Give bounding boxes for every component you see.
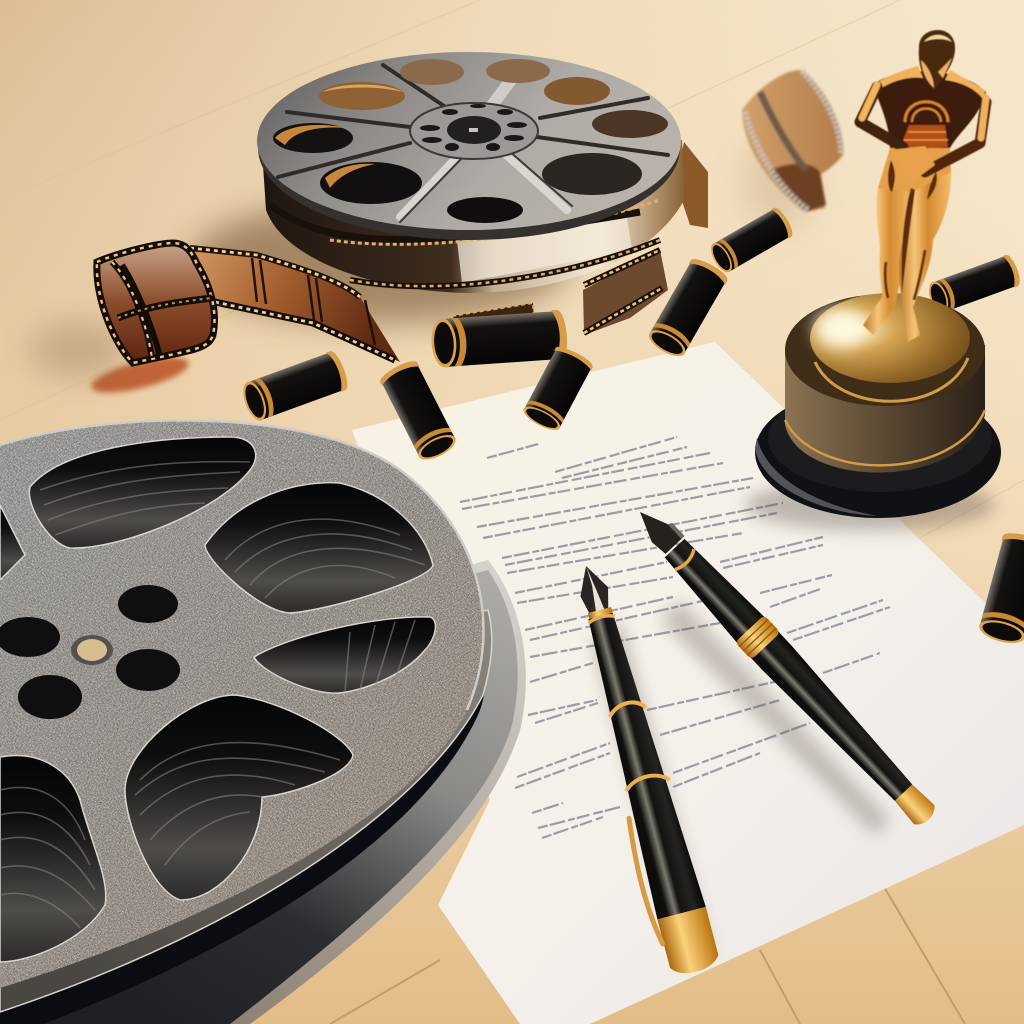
small film reel bbox=[257, 52, 708, 335]
canister 7 bbox=[925, 253, 1023, 316]
center hub bbox=[71, 635, 113, 665]
figure head bbox=[919, 30, 955, 90]
figure chest bbox=[873, 72, 986, 148]
top disc face bbox=[0, 420, 483, 988]
small hub holes bbox=[0, 585, 180, 719]
film canisters bbox=[239, 205, 1024, 648]
sheet of paper bbox=[352, 342, 1024, 1024]
figure arms bbox=[860, 87, 903, 147]
loose film strip bbox=[583, 250, 668, 335]
figure torso bbox=[878, 147, 951, 192]
figure left leg bbox=[863, 187, 912, 335]
canister 3 bbox=[377, 357, 460, 465]
curled film strip, top right bbox=[742, 70, 843, 212]
canister 2 bbox=[430, 309, 569, 369]
reel spokes bbox=[278, 65, 668, 222]
film strip behind canister bbox=[452, 303, 534, 330]
golden figure bbox=[860, 30, 986, 342]
shadows on table bbox=[30, 130, 816, 400]
script text lines bbox=[460, 437, 890, 838]
film behind reel bbox=[675, 142, 708, 228]
reel hub bbox=[410, 103, 538, 159]
outer disc rim bbox=[0, 560, 526, 1024]
canister 4 bbox=[520, 343, 595, 435]
metal speckle bbox=[0, 420, 483, 988]
fountain pen, left bbox=[560, 558, 721, 980]
big film reel stack bbox=[0, 420, 526, 1024]
canister 6 bbox=[707, 205, 796, 276]
pen shadows bbox=[592, 479, 995, 962]
reel windows bbox=[0, 437, 435, 962]
figure right leg bbox=[899, 170, 951, 342]
reel windows bbox=[273, 59, 668, 223]
figure leg shading bbox=[888, 160, 937, 295]
canister 1 bbox=[239, 349, 351, 424]
dark gap bbox=[0, 640, 486, 1024]
second disc rim bbox=[0, 610, 492, 1012]
film layers inside windows bbox=[0, 462, 425, 928]
trophy bbox=[755, 30, 1001, 518]
film wound around reel bbox=[262, 140, 684, 293]
trophy pedestal top bbox=[785, 294, 985, 406]
reel plate bbox=[258, 56, 680, 240]
figure chest ornament bbox=[905, 102, 948, 122]
canister 5 bbox=[644, 255, 730, 362]
outer disc face bbox=[0, 570, 518, 1024]
trophy base bbox=[755, 386, 1001, 518]
fountain pen, right bbox=[625, 498, 943, 833]
canister 8 bbox=[976, 529, 1024, 648]
film strip, left curl bbox=[97, 243, 400, 363]
